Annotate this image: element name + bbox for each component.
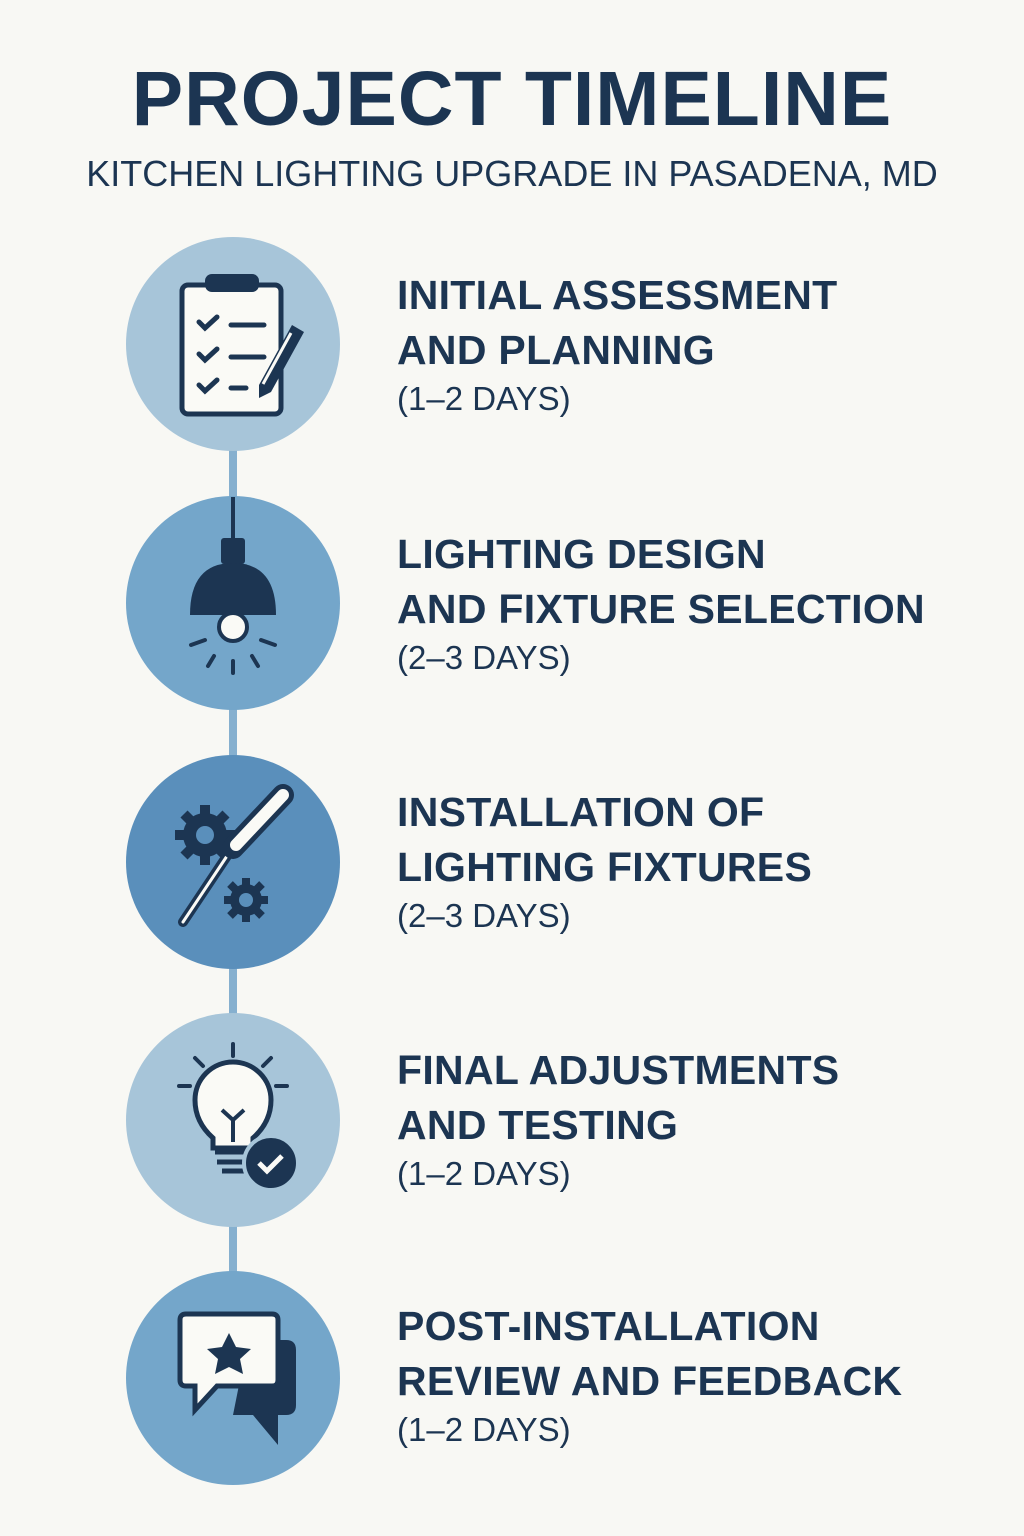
- step 4 text: AND TESTING: [397, 1102, 678, 1148]
- step 3 text: LIGHTING FIXTURES: [397, 844, 812, 890]
- subtitle: KITCHEN LIGHTING UPGRADE IN PASADENA, MD: [86, 153, 938, 194]
- step 3 text: [397, 789, 812, 934]
- step 5 icon: chat bubbles with star: [126, 1271, 340, 1485]
- step 1 icon: clipboard: [126, 237, 340, 451]
- step 3 icon: gears and screwdriver: [126, 755, 340, 969]
- step 1 text: (1–2 DAYS): [397, 380, 571, 417]
- step 4 text: [397, 1047, 839, 1192]
- step 2 icon: pendant lamp: [126, 496, 340, 710]
- step 3 text: (2–3 DAYS): [397, 897, 571, 934]
- title: PROJECT TIMELINE: [132, 56, 892, 142]
- connector line: [229, 440, 237, 1290]
- step 1 text: [397, 272, 838, 417]
- step 5 text: (1–2 DAYS): [397, 1411, 571, 1448]
- step 4 text: (1–2 DAYS): [397, 1155, 571, 1192]
- step 2 text: (2–3 DAYS): [397, 639, 571, 676]
- step 1 text: INITIAL ASSESSMENT: [397, 272, 838, 318]
- step 2 text: AND FIXTURE SELECTION: [397, 586, 925, 632]
- step 4 text: FINAL ADJUSTMENTS: [397, 1047, 839, 1093]
- step 5 text: POST-INSTALLATION: [397, 1303, 820, 1349]
- step 2 text: LIGHTING DESIGN: [397, 531, 766, 577]
- step 5 text: REVIEW AND FEEDBACK: [397, 1358, 902, 1404]
- step 4 icon: bulb with check: [126, 1013, 340, 1227]
- step 3 text: INSTALLATION OF: [397, 789, 764, 835]
- step 2 text: [397, 531, 925, 676]
- step 1 text: AND PLANNING: [397, 327, 715, 373]
- step 5 text: [397, 1303, 902, 1448]
